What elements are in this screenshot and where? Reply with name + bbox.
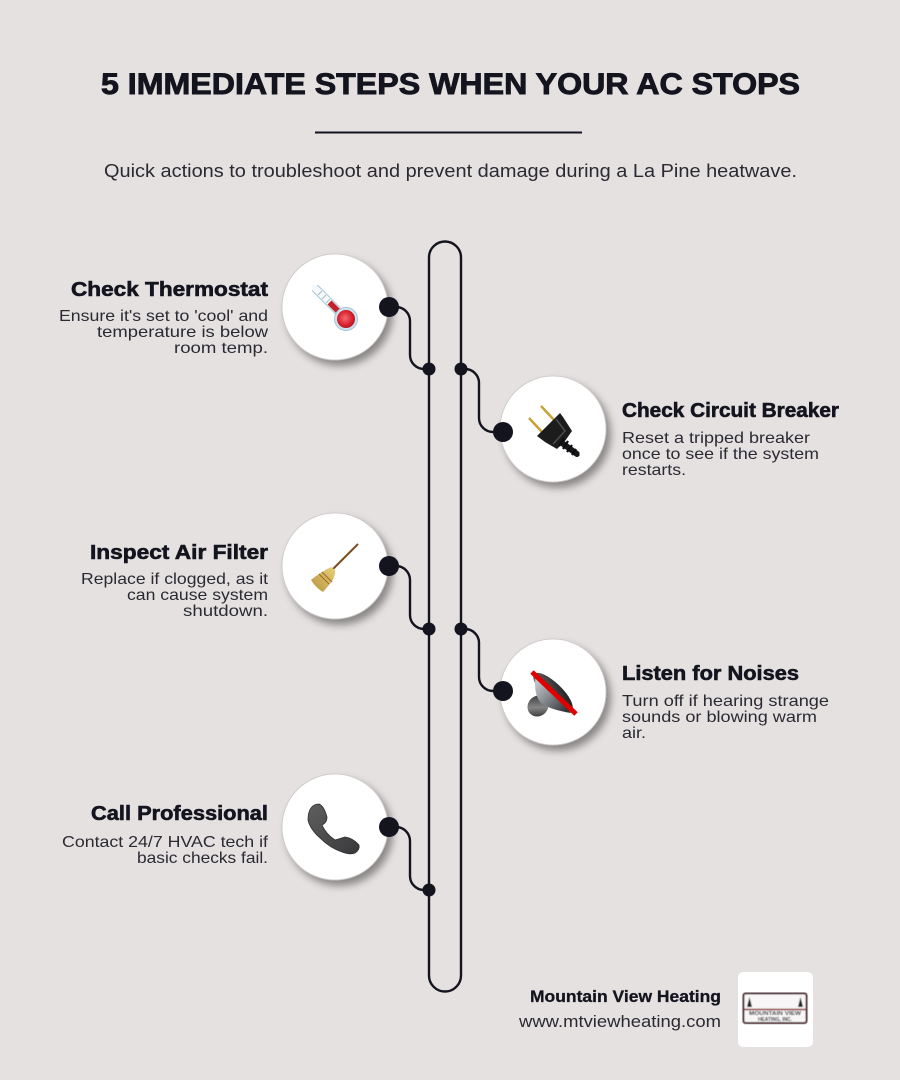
connector dot small [454, 622, 468, 636]
step 5 text [62, 834, 269, 867]
logo: MOUNTAIN VIEW [749, 1011, 802, 1017]
connector 3 [389, 566, 429, 629]
step 3: inspect air filter [81, 513, 436, 636]
step 3 text: shutdown. [183, 603, 268, 620]
connector 1 [389, 307, 429, 369]
subtitle: Quick actions to troubleshoot and prevent damage during a La Pine heatwave. [104, 161, 797, 181]
step 4 text: sounds or blowing warm [622, 709, 817, 726]
step 5 circle [282, 774, 388, 880]
footer brand name: Mountain View Heating [530, 987, 721, 1006]
step 2 heading: Check Circuit Breaker [622, 400, 839, 422]
step 2 text: restarts. [622, 462, 686, 479]
connector 2 [461, 369, 503, 432]
step 4 text: Turn off if hearing strange [622, 693, 829, 710]
connector dot large [379, 817, 399, 837]
connector dot small [454, 362, 468, 376]
step 1 circle [282, 254, 388, 360]
icon: thermometer [314, 288, 358, 330]
icon: phone handset [308, 804, 359, 854]
icon: plug [529, 406, 577, 455]
icon: muted speaker [523, 667, 578, 721]
step 1 text: room temp. [174, 340, 268, 357]
logo [738, 972, 813, 1047]
step 4 text: air. [622, 725, 646, 742]
step 4 text [622, 693, 829, 742]
central timeline rail [429, 242, 461, 992]
step 3 text: can cause system [127, 587, 268, 604]
step 5 heading: Call Professional [91, 803, 268, 825]
step 3 text [81, 571, 269, 620]
step 1 heading: Check Thermostat [71, 279, 268, 301]
step 2: check circuit breaker [454, 362, 839, 482]
step 2 text: Reset a tripped breaker [622, 430, 811, 447]
step 3 circle [282, 513, 388, 619]
logo: HEATING, INC. [758, 1017, 792, 1023]
footer website: www.mtviewheating.com [518, 1012, 721, 1031]
step 2 text: once to see if the system [622, 446, 819, 463]
connector dot small [422, 362, 436, 376]
connector dot large [493, 681, 513, 701]
connector dot large [493, 422, 513, 442]
step 5 text: Contact 24/7 HVAC tech if [62, 834, 269, 851]
step 1: check thermostat [59, 254, 436, 376]
connector dot small [422, 622, 436, 636]
step 1 text [59, 308, 269, 357]
connector 5 [389, 827, 429, 890]
step 3 text: Replace if clogged, as it [81, 571, 269, 588]
title: 5 IMMEDIATE STEPS WHEN YOUR AC STOPS [101, 68, 800, 101]
step 5: call professional [62, 774, 436, 896]
step 1 text: temperature is below [97, 324, 269, 341]
connector dot large [379, 556, 399, 576]
step 4 circle [500, 639, 606, 745]
step 2 text [622, 430, 819, 479]
title divider [315, 132, 582, 134]
connector dot small [422, 884, 436, 896]
connector dot large [379, 297, 399, 317]
step 5 text: basic checks fail. [137, 850, 268, 867]
step 3 heading: Inspect Air Filter [90, 542, 268, 564]
step 4: listen for noises [454, 622, 829, 745]
connector 4 [461, 629, 503, 691]
step 2 circle [500, 376, 606, 482]
step 4 heading: Listen for Noises [622, 663, 799, 685]
icon: broom [311, 544, 358, 592]
step 1 text: Ensure it's set to 'cool' and [59, 308, 268, 325]
